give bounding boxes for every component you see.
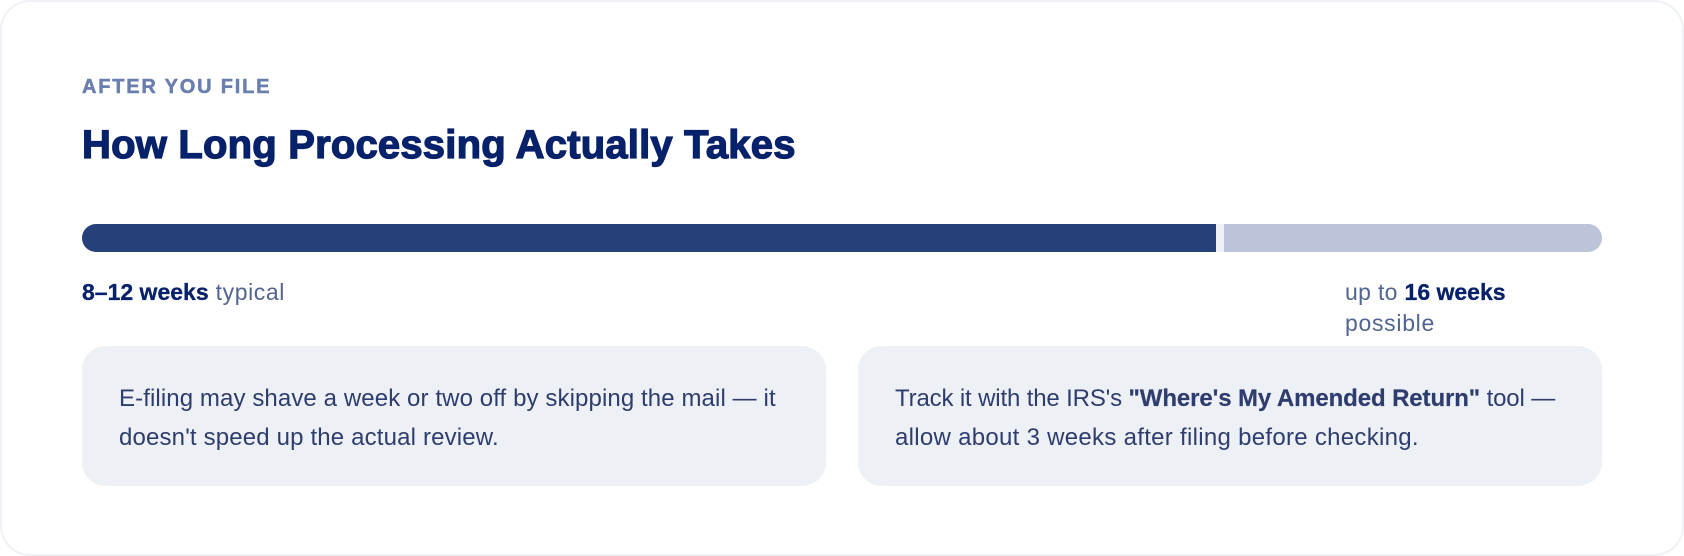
label: maximum duration: possible — [1345, 310, 1435, 336]
text: e-filing note: E-filing may shave a week or two off by skipping the mail — it — [119, 385, 776, 412]
label: maximum duration — [1345, 279, 1506, 336]
text: tracking note: allow about 3 weeks after filing before checking. — [895, 424, 1419, 450]
text: e-filing note — [119, 385, 776, 450]
panel: e-filing note — [82, 346, 826, 486]
panel: tracking note — [858, 346, 1602, 486]
label: typical duration: 8–12 weeks typical — [82, 279, 285, 305]
bar segment: 8–12 weeks typical — [82, 224, 1216, 252]
eyebrow label: AFTER YOU FILE — [82, 76, 271, 98]
text: tracking note: Track it with the IRS's "Where's My Amended Return" tool — — [895, 385, 1555, 412]
title: How Long Processing Actually Takes — [82, 123, 796, 167]
label: maximum duration: up to 16 weeks — [1345, 279, 1506, 305]
progress bar: processing timeline — [82, 224, 1602, 252]
text: tracking note — [895, 385, 1556, 450]
bar segment: up to 16 weeks possible — [1224, 224, 1602, 252]
text: e-filing note: doesn't speed up the actual review. — [119, 424, 499, 450]
